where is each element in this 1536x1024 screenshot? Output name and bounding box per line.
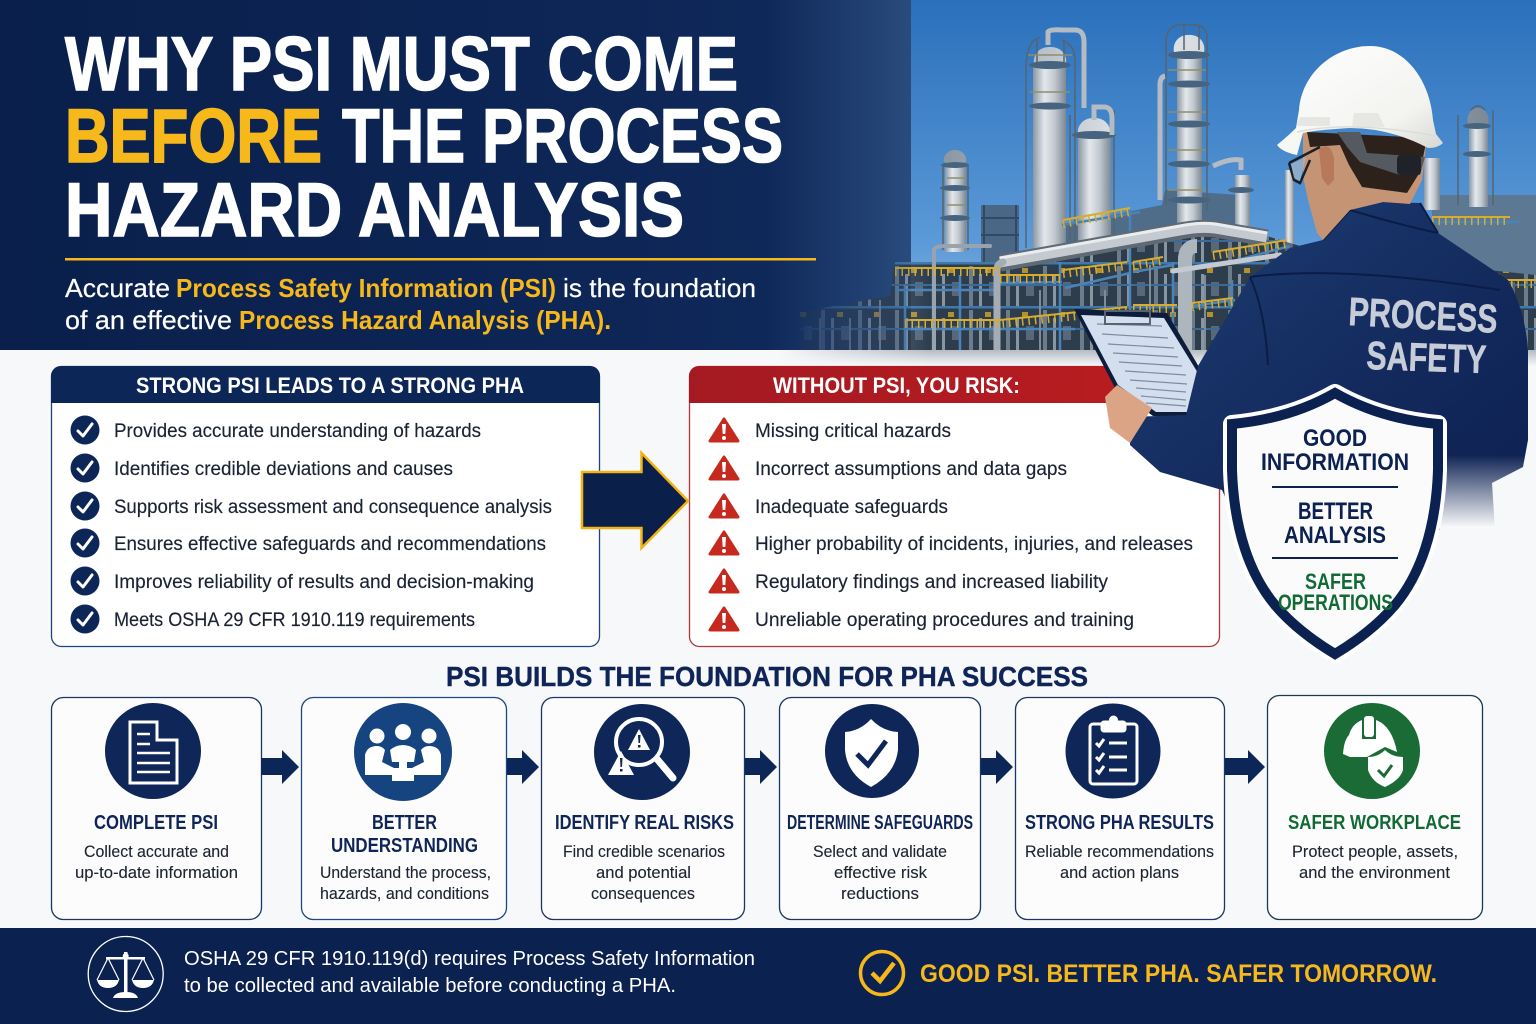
- arrow: [261, 750, 299, 784]
- panel: without PSI: [689, 366, 1220, 646]
- warning list: Regulatory findings and increased liability: [755, 572, 1108, 593]
- big pipe: [934, 223, 1280, 350]
- photo bottom fade band: [796, 350, 1536, 364]
- warning list: [710, 419, 1193, 631]
- shield: good information: [1232, 393, 1438, 654]
- arrow: [1225, 750, 1265, 784]
- card: complete PSI: up-to-date information: [75, 864, 238, 882]
- warning list: Higher probability of incidents, injuries, and releases: [755, 534, 1193, 555]
- card: complete PSI: [52, 698, 262, 920]
- distant structures: [1066, 190, 1235, 243]
- shield: good information: OPERATIONS: [1278, 590, 1393, 615]
- jacket lettering: SAFETY: [1366, 334, 1487, 382]
- card: complete PSI: COMPLETE PSI: [94, 812, 218, 834]
- hard hat: [1277, 46, 1443, 155]
- shield: good information: ANALYSIS: [1284, 522, 1386, 549]
- card: strong PHA results: Reliable recommendations: [1025, 843, 1214, 861]
- card: strong PHA results: and action plans: [1060, 864, 1179, 882]
- icon: document: [130, 722, 177, 783]
- jacket lettering: [1348, 290, 1499, 382]
- card: safer workplace: and the environment: [1299, 864, 1450, 882]
- icon: team: [365, 724, 441, 781]
- lower process structure: [800, 228, 1536, 350]
- title: THE PROCESS: [342, 94, 783, 179]
- arrow: [981, 750, 1013, 784]
- warning list: Missing critical hazards: [755, 421, 951, 442]
- shield: good information: GOOD: [1303, 425, 1367, 452]
- check list: Provides accurate understanding of hazards: [114, 421, 481, 442]
- panel: strong PSI: [51, 366, 600, 646]
- photo: refinery under blue sky: [780, 0, 1536, 366]
- jacket: [1130, 202, 1528, 530]
- subtitle: Process Safety Information (PSI): [176, 273, 556, 303]
- card: safer workplace: SAFER WORKPLACE: [1288, 812, 1461, 834]
- card: better understanding: [302, 698, 506, 920]
- arrow: [507, 750, 539, 784]
- footer band: GOOD PSI. BETTER PHA. SAFER TOMORROW.: [920, 960, 1437, 988]
- footer band: [0, 928, 1536, 1024]
- check list: Supports risk assessment and consequence analysis: [114, 497, 552, 518]
- card: identify real risks: IDENTIFY REAL RISKS: [555, 812, 734, 834]
- title: HAZARD ANALYSIS: [65, 168, 684, 253]
- title: [65, 22, 783, 253]
- glasses: [1289, 147, 1320, 183]
- title: BEFORE: [65, 94, 322, 179]
- yellow railings: [895, 208, 1536, 324]
- towers: [944, 35, 1489, 252]
- footer band: to be collected and available before conducting a PHA.: [184, 975, 676, 997]
- arrow: strong PSI to risk panel: [582, 453, 688, 548]
- check list: [70, 416, 552, 634]
- neck and head: [1303, 132, 1427, 240]
- card: determine safeguards: effective risk: [834, 864, 928, 882]
- warning list: Inadequate safeguards: [755, 497, 948, 518]
- worker with hard hat and clipboard: [1074, 46, 1528, 530]
- shield: good information: SAFER: [1305, 569, 1366, 594]
- arrow: [745, 750, 777, 784]
- card: strong PHA results: STRONG PHA RESULTS: [1025, 812, 1214, 834]
- card: identify real risks: consequences: [591, 885, 695, 903]
- shield: good information: BETTER: [1298, 498, 1373, 525]
- icon: scales of justice: [88, 936, 163, 1012]
- panel: without PSI: WITHOUT PSI, YOU RISK:: [773, 373, 1020, 398]
- check list: Improves reliability of results and decision-making: [114, 572, 534, 593]
- card: better understanding: hazards, and conditions: [320, 885, 489, 903]
- card: strong PHA results: [1016, 698, 1224, 920]
- clipboard: [1074, 309, 1202, 416]
- check list: Identifies credible deviations and causes: [114, 459, 453, 480]
- card: safer workplace: [1268, 696, 1482, 920]
- footer band: OSHA 29 CFR 1910.119(d) requires Process Safety Information: [184, 948, 755, 970]
- icon: shield check: [845, 719, 898, 787]
- hand: [1105, 385, 1152, 443]
- hat strap: [1337, 132, 1425, 175]
- card: identify real risks: [542, 698, 744, 920]
- icon: checklist clipboard: [1090, 717, 1137, 784]
- panel: strong PSI: STRONG PSI LEADS TO A STRONG PHA: [136, 373, 524, 398]
- card: determine safeguards: reductions: [841, 885, 919, 903]
- subtitle: Accurate: [65, 273, 170, 303]
- subtitle: Process Hazard Analysis (PHA).: [239, 305, 611, 335]
- check list: Meets OSHA 29 CFR 1910.119 requirements: [114, 610, 475, 631]
- card: identify real risks: Find credible scenarios: [563, 843, 725, 861]
- card: determine safeguards: [780, 698, 980, 920]
- title: WHY PSI MUST COME: [65, 22, 738, 107]
- subtitle: of an effective: [65, 305, 232, 335]
- section heading: PSI BUILDS THE FOUNDATION FOR PHA SUCCESS: [446, 661, 1088, 692]
- icon: magnifier and warning: [608, 719, 673, 778]
- shield: good information: INFORMATION: [1261, 449, 1409, 476]
- card: better understanding: UNDERSTANDING: [331, 835, 478, 857]
- card: better understanding: BETTER: [372, 812, 437, 834]
- subtitle: is the foundation: [563, 273, 756, 303]
- warning list: Incorrect assumptions and data gaps: [755, 459, 1067, 480]
- icon: hard hat and shield: [1343, 716, 1403, 787]
- card: complete PSI: Collect accurate and: [84, 843, 229, 861]
- check list: Ensures effective safeguards and recommendations: [114, 534, 546, 555]
- card: determine safeguards: Select and validate: [813, 843, 947, 861]
- subtitle: [65, 273, 756, 335]
- card: determine safeguards: DETERMINE SAFEGUARDS: [787, 812, 973, 834]
- card: safer workplace: Protect people, assets,: [1292, 843, 1458, 861]
- icon: gold check: [860, 952, 904, 994]
- warning list: Unreliable operating procedures and training: [755, 610, 1134, 631]
- card: better understanding: Understand the process,: [320, 864, 491, 882]
- header background: [0, 0, 911, 350]
- card: identify real risks: and potential: [596, 864, 691, 882]
